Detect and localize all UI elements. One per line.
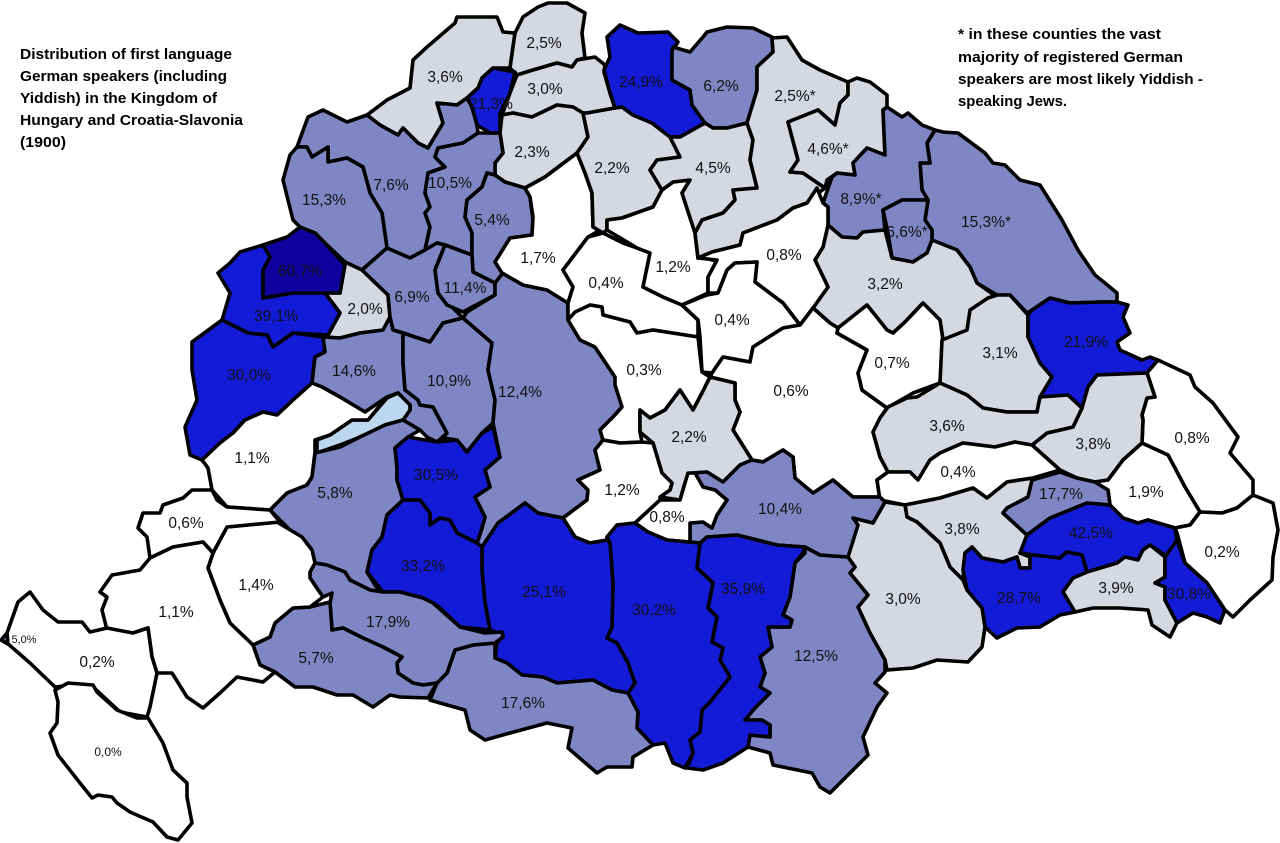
county 0,0% <box>50 683 192 840</box>
county 3,0% north: 3,0% <box>527 81 563 98</box>
footnote: Yiddish-speaking counties: majority of registered German <box>958 50 1183 66</box>
county 14,6% <box>312 317 447 442</box>
title: Hungary and Croatia-Slavonia <box>20 113 244 129</box>
county 2,2% centre: 2,2% <box>671 429 707 446</box>
county 39,1% <box>218 245 340 347</box>
county 30,5%: 30,5% <box>414 467 458 484</box>
county 3,8% south-east <box>905 478 1033 580</box>
county 0,8% north-east of centre: 0,8% <box>766 247 802 264</box>
county 30,0%: 30,0% <box>227 367 271 384</box>
county 0,3%: 0,3% <box>626 362 662 379</box>
county 6,9% <box>362 243 463 342</box>
county 15,3%* <box>920 130 1117 313</box>
county 0,2% west: 0,2% <box>79 654 115 671</box>
county 17,9% <box>310 563 503 685</box>
county 4,5%: 4,5% <box>695 160 731 177</box>
county 0,4% east <box>877 442 1060 505</box>
county 7,6% <box>297 98 478 258</box>
county 1,4% <box>208 522 323 645</box>
county 1,1% west: 1,1% <box>234 450 270 467</box>
county 1,2% north-centre: 1,2% <box>655 259 691 276</box>
county 8,9%* <box>823 107 935 238</box>
county 1,2% south-centre <box>563 440 672 543</box>
county 1,7%: 1,7% <box>520 250 556 267</box>
county 17,9%: 17,9% <box>366 614 410 631</box>
county 10,4%: 10,4% <box>758 501 802 518</box>
county 0,7%: 0,7% <box>874 355 910 372</box>
county 2,2% centre <box>640 377 752 500</box>
county 5,0% coastal enclave <box>1 633 37 646</box>
county 0,6% centre <box>710 308 888 502</box>
county 3,1% <box>940 295 1052 412</box>
county 1,4%: 1,4% <box>238 577 274 594</box>
county 3,8% south-east: 3,8% <box>944 521 980 538</box>
county 4,5% <box>650 123 757 233</box>
county 2,0% <box>323 262 390 338</box>
footnote: Yiddish-speaking counties <box>958 27 1203 110</box>
county 60,7% <box>263 227 345 298</box>
county 1,1% west <box>202 383 387 510</box>
footnote: Yiddish-speaking counties: speaking Jews. <box>958 94 1067 110</box>
county 3,2% <box>813 225 997 340</box>
county 33,2%: 33,2% <box>401 558 445 575</box>
county 5,4% <box>465 173 533 283</box>
county 30,0% <box>185 320 325 460</box>
county 3,9%: 3,9% <box>1098 580 1134 597</box>
county 0,2% east <box>1175 495 1278 617</box>
county 21,3% <box>467 68 515 133</box>
county 0,6% south-west <box>138 490 280 558</box>
county 3,8% east: 3,8% <box>1075 436 1111 453</box>
county 1,9%: 1,9% <box>1128 484 1164 501</box>
lake Balaton <box>317 393 410 453</box>
county 2,3%: 2,3% <box>514 144 550 161</box>
county 3,6% north-west: 3,6% <box>427 69 463 86</box>
county 25,1%: 25,1% <box>522 584 566 601</box>
county 2,2% north-centre: 2,2% <box>594 160 630 177</box>
county 33,2% <box>367 500 490 630</box>
county 0,2% east: 0,2% <box>1204 544 1240 561</box>
county 42,5% <box>1020 503 1177 572</box>
county 7,6%: 7,6% <box>373 177 409 194</box>
county 10,9% <box>403 318 495 452</box>
county 6,6%* <box>883 200 932 262</box>
county 0,6% south-west: 0,6% <box>168 515 204 532</box>
county 5,4%: 5,4% <box>474 212 510 229</box>
county 0,8% east <box>1142 360 1253 513</box>
county 4,6%* <box>788 78 887 188</box>
county 12,4% <box>463 273 622 547</box>
county 1,1% south-west: 1,1% <box>158 604 194 621</box>
county 3,6% north-west <box>367 17 515 148</box>
county 1,2% south-centre: 1,2% <box>604 482 640 499</box>
county 12,5% <box>745 547 887 793</box>
county 2,5% north <box>510 3 585 75</box>
county 35,9% <box>687 535 805 770</box>
title: Distribution of first language <box>20 47 232 63</box>
county 28,7% <box>963 547 1087 638</box>
county 6,2% <box>672 27 773 128</box>
county 2,0%: 2,0% <box>347 301 383 318</box>
county 14,6%: 14,6% <box>332 363 376 380</box>
county 24,9% <box>604 25 705 137</box>
county 3,9% <box>1063 545 1177 637</box>
county 17,6% <box>430 643 653 773</box>
title: German speakers (including <box>20 69 227 85</box>
county 5,7% <box>253 602 437 707</box>
county 1,2% north-centre <box>607 180 720 305</box>
county 35,9%: 35,9% <box>721 581 765 598</box>
county 0,8% north-east of centre <box>698 188 828 325</box>
county 0,6% centre: 0,6% <box>773 383 809 400</box>
county 3,2%: 3,2% <box>867 276 903 293</box>
county 10,5%: 10,5% <box>428 175 472 192</box>
county 25,1% <box>482 503 635 693</box>
county 10,5% <box>425 133 503 255</box>
county 3,0% south-east <box>848 502 985 670</box>
county 3,0% north <box>502 57 615 117</box>
county 11,4% <box>435 245 495 312</box>
county 2,2% north-centre <box>577 107 680 233</box>
county 5,7%: 5,7% <box>298 650 334 667</box>
county 30,2%: 30,2% <box>632 602 676 619</box>
county 15,3% west: 15,3% <box>302 192 346 209</box>
county 11,4%: 11,4% <box>444 280 487 297</box>
county 0,2% west <box>7 592 157 717</box>
title <box>20 47 244 151</box>
county 4,6%*: 4,6%* <box>807 141 849 158</box>
county 42,5%: 42,5% <box>1069 525 1113 542</box>
title: (1900) <box>20 135 66 151</box>
county 10,4% <box>690 450 885 557</box>
county 0,7% <box>837 303 943 408</box>
county 0,0%: 0,0% <box>94 745 122 759</box>
county 28,7%: 28,7% <box>997 590 1041 607</box>
county 30,2% <box>607 523 730 768</box>
county 10,9%: 10,9% <box>427 373 471 390</box>
footnote: Yiddish-speaking counties: speakers are most likely Yiddish - <box>958 72 1203 88</box>
county 3,1%: 3,1% <box>982 345 1018 362</box>
county 0,8% south-centre: 0,8% <box>649 509 685 526</box>
county 0,4% centre: 0,4% <box>714 312 750 329</box>
county 6,2%: 6,2% <box>703 78 739 95</box>
county 5,0% coastal enclave: 5,0% <box>11 634 37 646</box>
county 6,6%*: 6,6%* <box>886 224 928 241</box>
county 0,4% west-centre: 0,4% <box>588 275 624 292</box>
county 17,7% <box>1003 472 1110 535</box>
county 3,6% east <box>873 383 1082 480</box>
county 12,5%: 12,5% <box>794 648 838 665</box>
county 60,7%: 60,7% <box>278 263 322 280</box>
county 30,8%: 30,8% <box>1167 586 1211 603</box>
county 1,1% south-west <box>100 542 275 708</box>
county 39,1%: 39,1% <box>254 308 298 325</box>
county 0,4% west-centre <box>563 233 698 337</box>
county 12,4%: 12,4% <box>498 384 542 401</box>
county 1,9% <box>1095 443 1200 528</box>
county 17,7%: 17,7% <box>1039 486 1083 503</box>
county 21,9%: 21,9% <box>1064 334 1108 351</box>
county 1,7% <box>495 153 600 303</box>
county 2,5%*: 2,5%* <box>774 88 816 105</box>
county 30,8% <box>1155 540 1225 623</box>
county 2,5% north: 2,5% <box>526 35 562 52</box>
county 0,4% east: 0,4% <box>940 464 976 481</box>
county 8,9%*: 8,9%* <box>840 191 882 208</box>
county 6,9%: 6,9% <box>394 289 430 306</box>
county 0,8% east: 0,8% <box>1174 430 1210 447</box>
county 3,6% east: 3,6% <box>929 418 965 435</box>
county 21,3%: 21,3% <box>469 96 513 113</box>
county 0,4% centre <box>682 262 800 373</box>
county 30,5% <box>395 427 500 543</box>
footnote: Yiddish-speaking counties: * in these counties the vast <box>958 27 1161 43</box>
county 2,5%* <box>695 37 848 258</box>
county 0,3% <box>568 305 710 443</box>
county 24,9%: 24,9% <box>619 74 663 91</box>
county 3,8% east <box>1032 373 1155 482</box>
county 3,0% south-east: 3,0% <box>885 591 921 608</box>
county 5,8%: 5,8% <box>317 485 353 502</box>
county 17,6%: 17,6% <box>501 695 545 712</box>
county 2,3% <box>495 105 588 188</box>
county 5,8% <box>270 420 420 593</box>
county 15,3% west <box>283 147 387 270</box>
title: Yiddish) in the Kingdom of <box>20 91 217 107</box>
county 15,3%*: 15,3%* <box>961 214 1011 231</box>
county 21,9% <box>1028 298 1158 408</box>
county 0,8% south-centre <box>635 473 727 542</box>
